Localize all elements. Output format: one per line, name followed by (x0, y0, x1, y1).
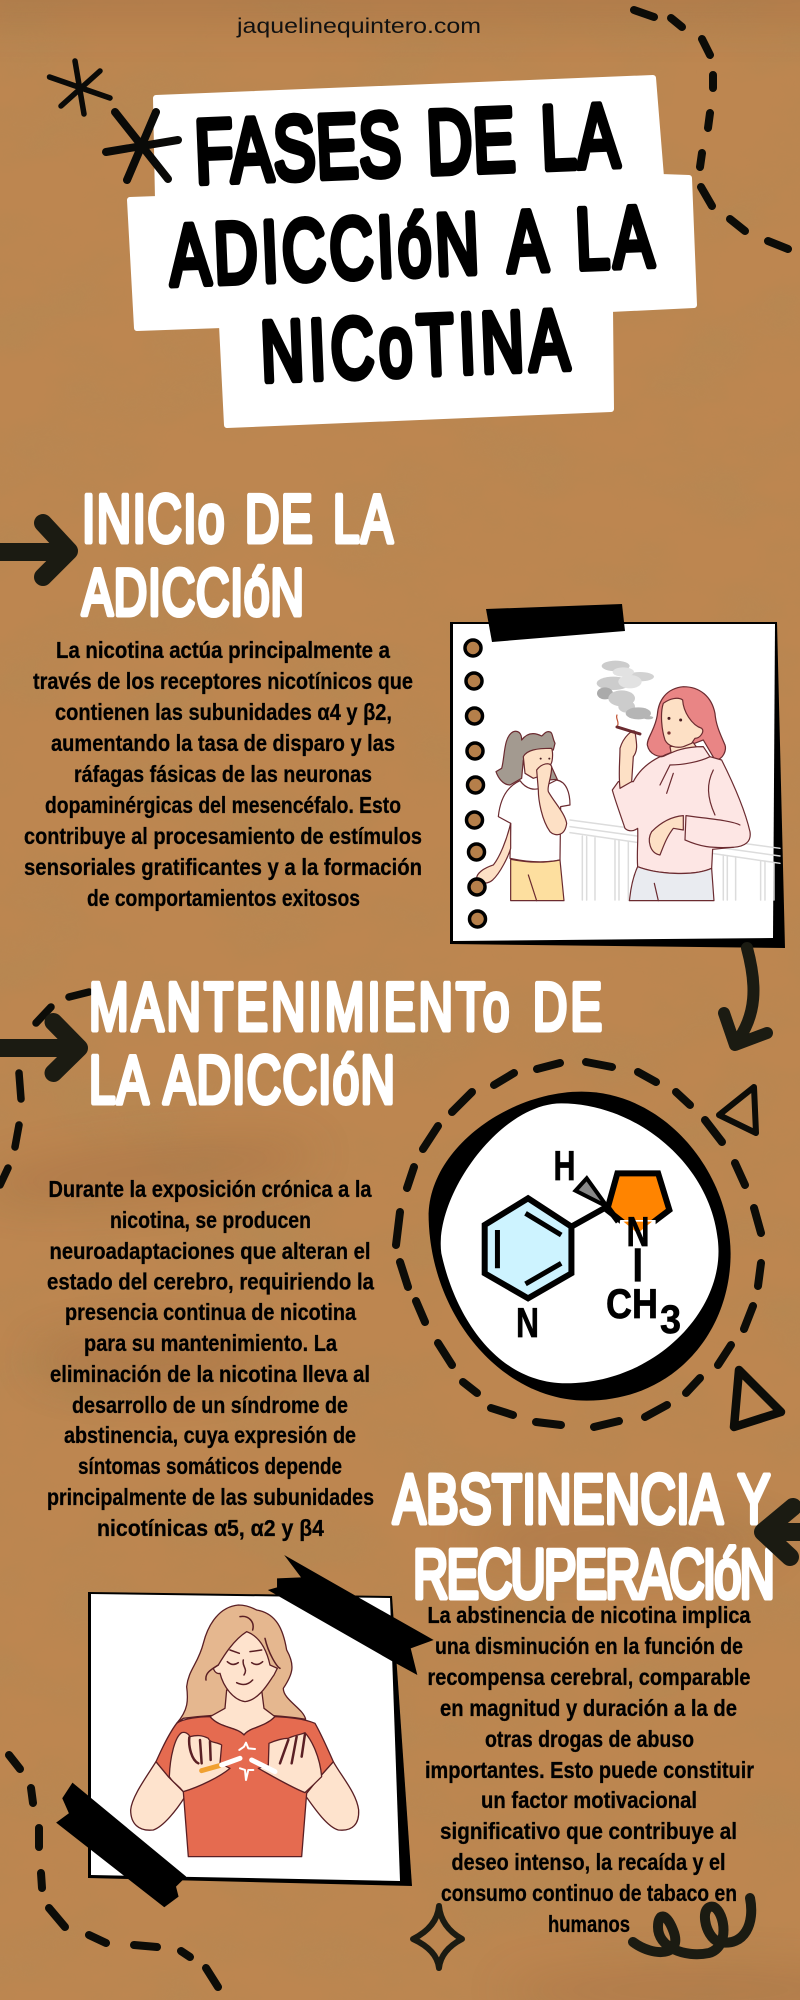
text block: mantenimiento: eliminación de la nicotina lleva al (50, 1361, 370, 1387)
text block: mantenimiento: síntomas somáticos depende (78, 1453, 342, 1479)
text block: mantenimiento: abstinencia, cuya expresión de (64, 1422, 356, 1448)
text block: inicio: ráfagas fásicas de las neuronas (74, 761, 372, 787)
molecule drawing (429, 1092, 731, 1401)
text block: abstinencia: humanos (548, 1911, 630, 1937)
text block: mantenimiento: neuroadaptaciones que alteran el (50, 1238, 370, 1264)
text block: inicio: través de los receptores nicotínicos que (33, 668, 413, 694)
text block: abstinencia: en magnitud y duración a la de (440, 1695, 737, 1721)
icon: triangles (719, 1087, 781, 1427)
text block: mantenimiento: presencia continua de nicotina (65, 1299, 356, 1325)
text block: mantenimiento (47, 1176, 374, 1541)
title text: NICoTINA (259, 292, 571, 400)
heading: inicio (82, 482, 393, 630)
text block: mantenimiento: Durante la exposición crónica a la (48, 1176, 372, 1202)
black tapes (56, 1555, 434, 1907)
decorative dashed arc, left (0, 992, 89, 1185)
binder holes (465, 640, 486, 927)
text block: mantenimiento: desarrollo de un síndrome de (72, 1392, 348, 1418)
girl (496, 731, 555, 785)
text block: abstinencia: deseo intenso, la recaída y el (452, 1849, 726, 1875)
illustration: woman breaking a cigarette (131, 1605, 359, 1857)
icon: swirl (633, 1898, 751, 1954)
text block: inicio: sensoriales gratificantes y a la formación (24, 854, 422, 880)
heading: abstinencia: RECUPERACIóN (413, 1534, 775, 1613)
text block: abstinencia: recompensa cerebral, comparable (428, 1664, 750, 1690)
text block: inicio: dopaminérgicas del mesencéfalo. Esto (45, 792, 401, 818)
heading: mantenimiento (89, 970, 602, 1118)
text block: mantenimiento: estado del cerebro, requiriendo la (47, 1268, 374, 1294)
heading: mantenimiento: MANTENIMIENTo DE (89, 970, 602, 1045)
text block: inicio (24, 637, 422, 911)
arrow: section 1 (0, 523, 69, 577)
text block: mantenimiento: nicotina, se producen (110, 1207, 311, 1233)
decorative dashed arc, top right (634, 10, 788, 249)
black tape (486, 604, 625, 642)
photo card: breaking cigarette (56, 1555, 434, 1907)
text block: abstinencia: una disminución en la función de (435, 1633, 743, 1659)
title text (168, 86, 655, 400)
dashed ring (396, 1062, 761, 1427)
molecule badge: nicotine (396, 1062, 761, 1427)
website credit: jaquelinequintero.com (236, 15, 481, 38)
text block: abstinencia: importantes. Esto puede constituir (425, 1757, 754, 1783)
molecule labels: N (516, 1299, 539, 1346)
icon: asterisks (50, 61, 178, 180)
text block: mantenimiento: principalmente de las subunidades (47, 1484, 374, 1510)
woman (647, 687, 725, 760)
icon: diamond star (413, 1906, 462, 1968)
text block: abstinencia: consumo continuo de tabaco en (441, 1880, 737, 1906)
text block: mantenimiento: nicotínicas α5, α2 y β4 (97, 1515, 324, 1541)
molecule labels: CH (606, 1280, 658, 1327)
molecule labels: N (626, 1208, 650, 1255)
heading: inicio: INICIo DE LA (82, 482, 393, 557)
illustration: girl and woman smoking (477, 661, 780, 901)
molecule labels (516, 1142, 681, 1346)
text block: mantenimiento: para su mantenimiento. La (84, 1330, 337, 1356)
text block: inicio: de comportamientos exitosos (87, 885, 360, 911)
text block: abstinencia: significativo que contribuye al (440, 1818, 737, 1844)
heading: abstinencia: ABSTINENCIA Y (393, 1459, 770, 1538)
text block: abstinencia (425, 1602, 754, 1937)
molecule labels: 3 (660, 1298, 681, 1342)
molecule labels: H (554, 1142, 576, 1189)
decorative dashed arc, bottom left (9, 1755, 218, 1987)
heading: inicio: ADICCIóN (82, 556, 304, 630)
arrow: card to molecule (724, 948, 767, 1045)
text block: inicio: contienen las subunidades α4 y β2, (55, 699, 392, 725)
heading: mantenimiento: LA ADICCIóN (89, 1043, 395, 1118)
arrow: section 2 (0, 1022, 79, 1073)
text block: abstinencia: otras drogas de abuso (485, 1726, 694, 1752)
text block: inicio: La nicotina actúa principalmente a (56, 637, 390, 663)
title text: ADICCIóN A LA (168, 188, 655, 304)
text block: abstinencia: La abstinencia de nicotina implica (428, 1602, 751, 1628)
text block: abstinencia: un factor motivacional (481, 1787, 697, 1813)
text block: inicio: aumentando la tasa de disparo y las (51, 730, 395, 756)
title text: FASES DE LA (193, 86, 621, 203)
photo card: smoking scene (450, 604, 785, 948)
text block: inicio: contribuye al procesamiento de estímulos (24, 823, 422, 849)
heading: abstinencia (393, 1459, 775, 1613)
arrow: section 3 (763, 1507, 800, 1557)
title panel (130, 78, 694, 425)
